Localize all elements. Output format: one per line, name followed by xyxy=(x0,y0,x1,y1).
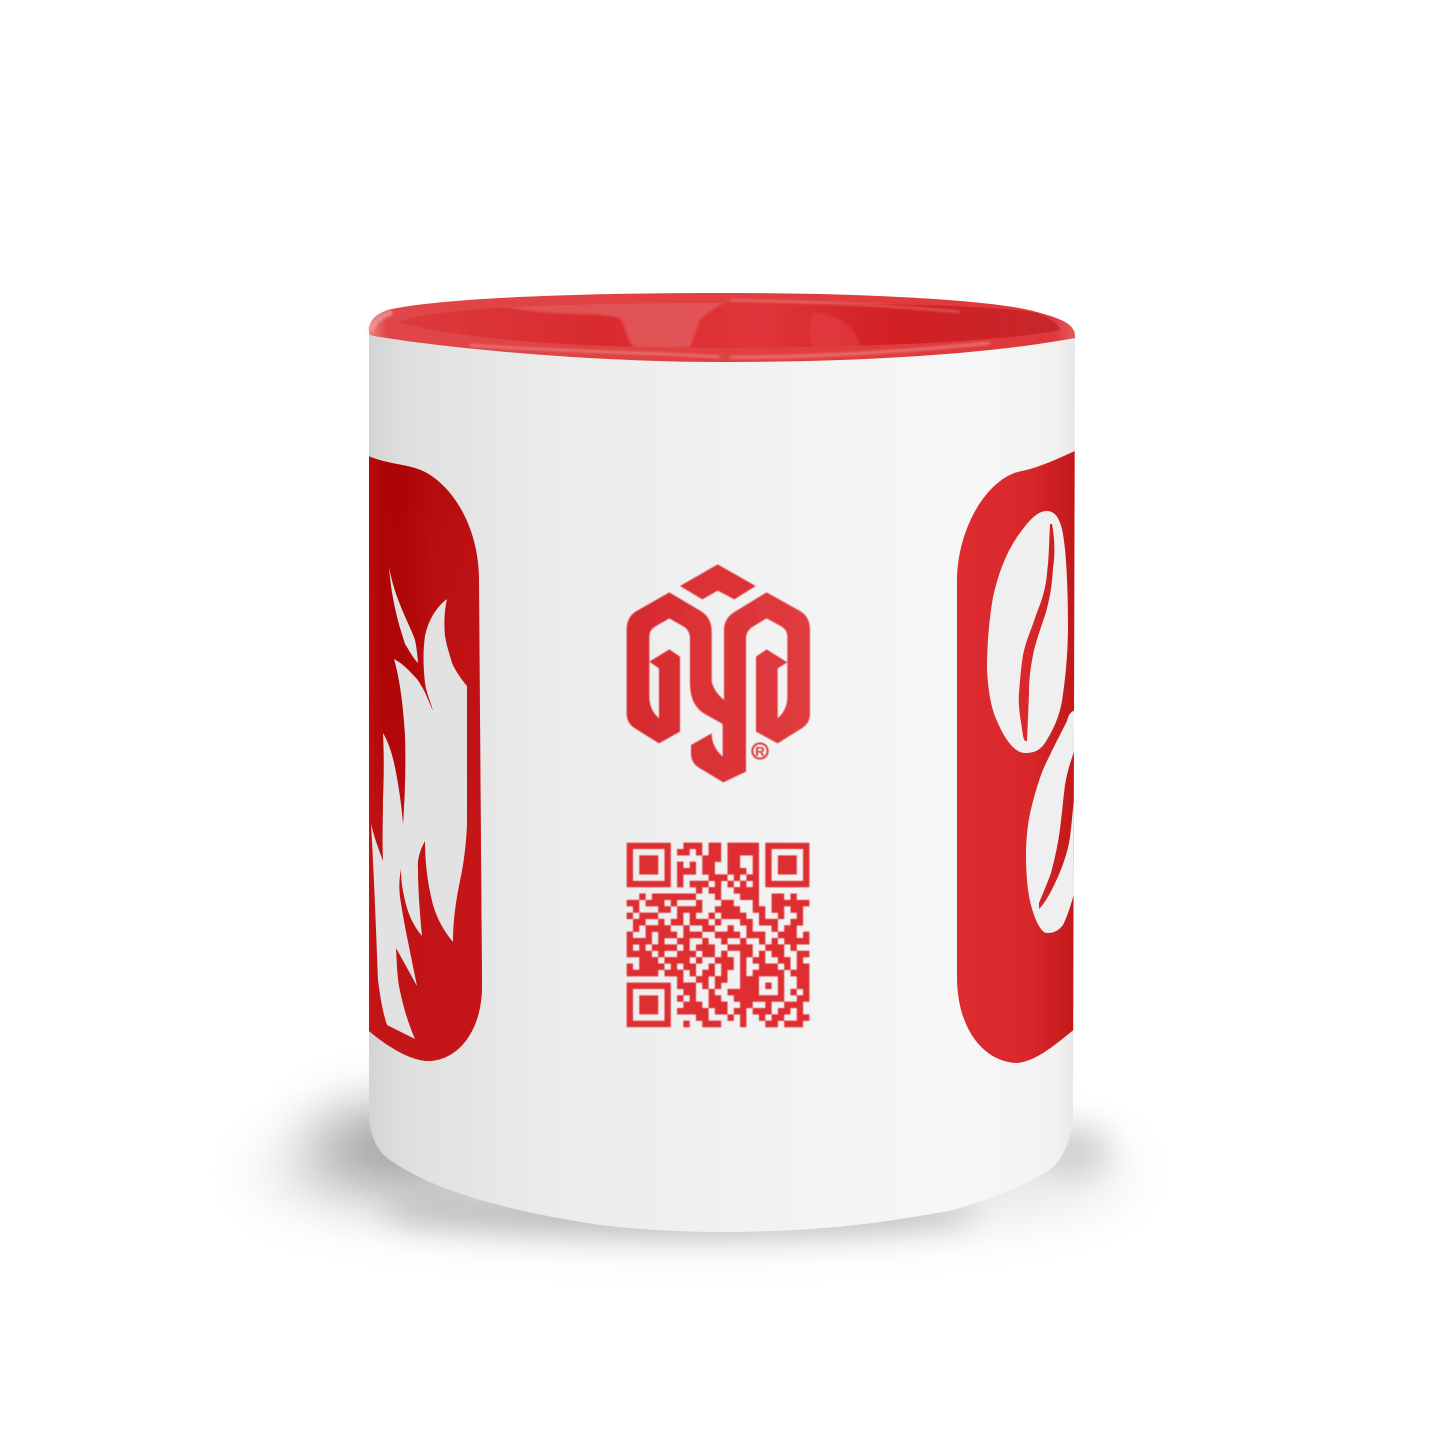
panel: coffee bean badge xyxy=(957,451,1075,1063)
QR data modules xyxy=(627,846,809,1024)
logo: hexagon monogram xyxy=(627,564,810,782)
QR finder patterns xyxy=(627,843,809,1027)
mug rim xyxy=(369,293,1075,362)
icon: coffee bean upper xyxy=(987,511,1068,753)
logo chevron xyxy=(680,564,756,599)
icon: coffee bean lower xyxy=(1026,710,1075,933)
panel: flame badge xyxy=(368,456,482,1061)
logo letterform xyxy=(627,592,810,782)
mug body xyxy=(369,330,1075,1232)
ground shadow xyxy=(250,1109,1130,1236)
icon: flame xyxy=(371,567,467,1039)
QR code xyxy=(627,843,809,1027)
registered mark xyxy=(752,743,768,759)
registered mark: R xyxy=(755,744,765,759)
mug illustration xyxy=(259,293,1125,1256)
